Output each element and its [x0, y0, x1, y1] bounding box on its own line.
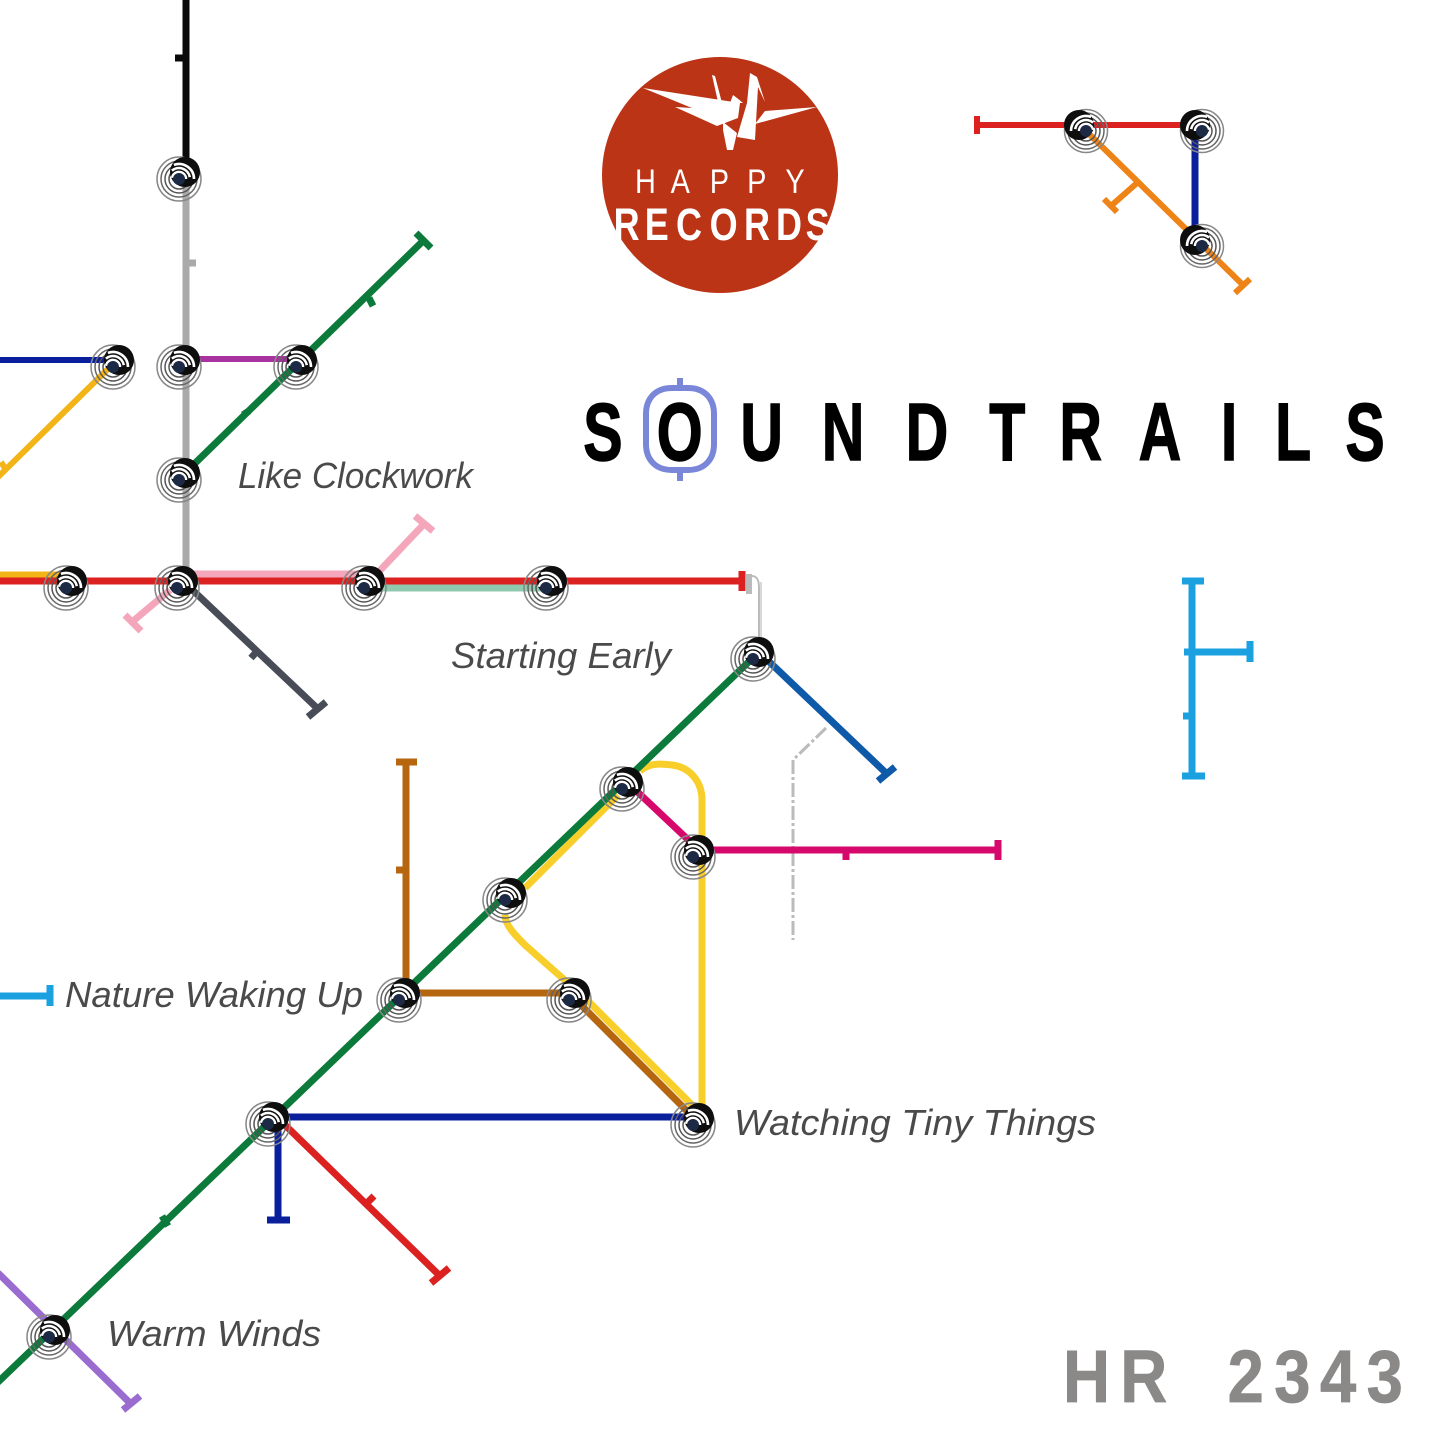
line: blue	[759, 652, 895, 781]
label: Watching Tiny Things: Watching Tiny Things	[734, 1102, 1096, 1143]
line: slate	[183, 581, 326, 717]
label: Starting Early: Starting Early	[451, 635, 673, 676]
line: light blue left	[0, 985, 50, 1006]
line: dark blue lower	[267, 1117, 699, 1220]
stations	[27, 110, 1224, 1359]
label: Warm Winds: Warm Winds	[107, 1313, 321, 1354]
transfer: grey connector	[750, 576, 759, 640]
station ring around O	[646, 378, 714, 481]
line: light blue right	[1182, 580, 1250, 777]
line: black	[175, 0, 186, 172]
line: green main	[0, 652, 759, 1385]
line: orange top right	[1085, 130, 1250, 293]
logo text: RECORDS: RECORDS	[614, 199, 830, 250]
line: yellow	[505, 764, 702, 1118]
line: magenta	[628, 783, 998, 860]
line: red lower	[285, 1125, 449, 1283]
catalogue number: HR2343	[1063, 1335, 1403, 1418]
logo: Happy Records	[602, 57, 838, 293]
line: pink	[125, 516, 433, 631]
logo text: HAPPY: HAPPY	[635, 162, 805, 201]
line: green upper	[185, 233, 431, 473]
icon: origami crane	[643, 73, 817, 150]
line: purple link	[185, 356, 302, 362]
line: dark blue top right	[1192, 125, 1198, 240]
line: red top right	[977, 116, 1197, 134]
label: Like Clockwork: Like Clockwork	[238, 455, 475, 496]
line: brown	[396, 760, 690, 1114]
line: red long	[0, 571, 743, 591]
line: grey	[186, 172, 196, 581]
title: SOUNDTRAILS: SOUNDTRAILS	[583, 387, 1385, 478]
line: amber stub	[0, 572, 60, 578]
line: dark blue left	[0, 357, 119, 363]
line: grey dash-dot	[793, 728, 826, 940]
line: teal	[375, 584, 552, 592]
label: Nature Waking Up: Nature Waking Up	[65, 974, 363, 1015]
line: violet	[0, 1273, 140, 1410]
line: amber left	[0, 362, 115, 480]
